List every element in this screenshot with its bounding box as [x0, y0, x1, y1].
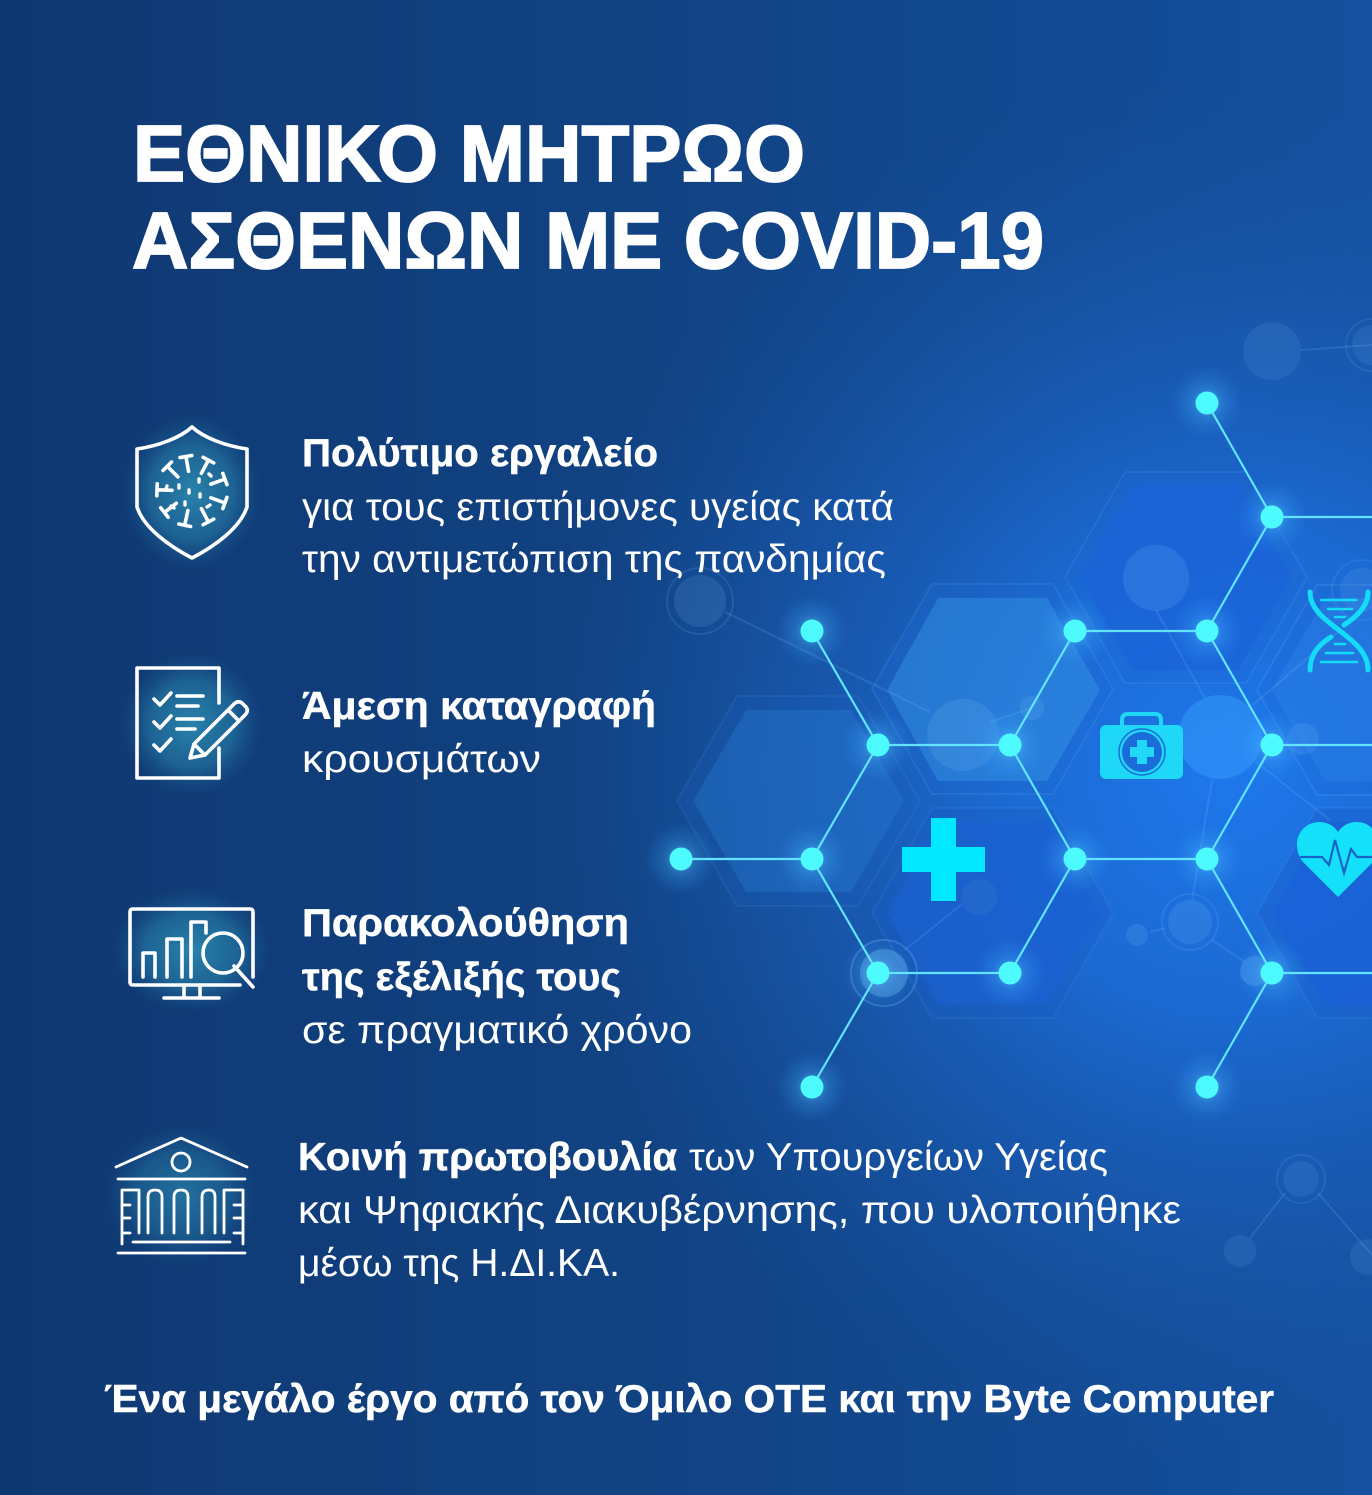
icon: heart with pulse — [1297, 822, 1372, 897]
background hexagons — [677, 472, 1372, 1018]
text: item 3: της εξέλιξής τους — [302, 956, 621, 999]
icon: shield with virus — [122, 414, 262, 570]
text: item 3: Παρακολούθηση — [302, 902, 629, 945]
icon: checklist with pencil — [120, 652, 264, 796]
title: ΕΘΝΙΚΟ ΜΗΤΡΩΟ — [133, 109, 805, 198]
icon: medical cross — [902, 818, 985, 901]
text: item 4: και Ψηφιακής Διακυβέρνησης, που υλοποιήθηκε — [298, 1189, 1181, 1232]
text: item 3 — [302, 902, 692, 1052]
title — [132, 109, 1044, 285]
text: item 4 — [298, 1136, 1181, 1285]
text: item 4: των Υπουργείων Υγείας — [689, 1136, 1108, 1179]
node glows — [645, 367, 1308, 1123]
text: item 2 — [302, 685, 656, 781]
text: item 3: σε πραγματικό χρόνο — [302, 1009, 692, 1052]
icon: first aid kit — [1100, 714, 1183, 779]
text: item 1 — [302, 432, 894, 581]
text: item 4: μέσω της Η.ΔΙ.ΚΑ. — [298, 1242, 620, 1285]
text: item 1: Πολύτιμο εργαλείο — [302, 432, 658, 475]
text: item 1: για τους επιστήμονες υγείας κατά — [302, 486, 894, 529]
icon: dna helix — [1310, 592, 1368, 670]
footer statement: Ένα μεγάλο έργο από τον Όμιλο ΟΤΕ και την Byte Computer — [104, 1378, 1274, 1421]
text: item 2: κρουσμάτων — [302, 738, 541, 781]
molecule network nodes — [670, 392, 1284, 1098]
icon: monitor with chart and magnifier — [112, 888, 272, 1012]
icon: government building — [104, 1125, 260, 1265]
text: item 2: Άμεση καταγραφή — [302, 685, 656, 728]
title: ΑΣΘΕΝΩΝ ΜΕ COVID-19 — [132, 196, 1044, 285]
text: item 4: Κοινή πρωτοβουλία — [298, 1136, 677, 1179]
background molecules — [667, 319, 1372, 1275]
text: item 1: την αντιμετώπιση της πανδημίας — [302, 538, 886, 581]
molecule network edges — [681, 403, 1372, 1087]
